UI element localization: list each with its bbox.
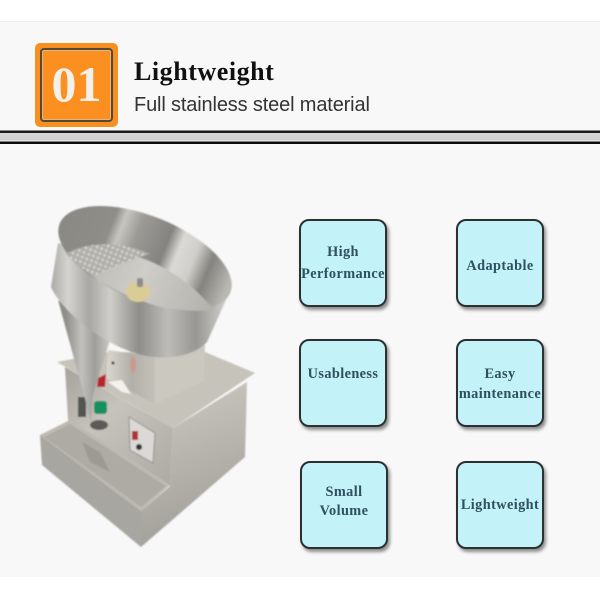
card: High Performance: High: [327, 244, 359, 260]
card: Lightweight: Lightweight: [461, 497, 539, 513]
card: Lightweight: [456, 461, 544, 549]
card: Small Volume: Volume: [320, 503, 368, 519]
tray front: [40, 435, 141, 547]
card: Small Volume: Small: [326, 484, 362, 500]
card: Easy maintenance: [456, 339, 544, 427]
card: High Performance: Performance: [301, 266, 385, 282]
machine: [40, 185, 255, 547]
red tab: [97, 374, 106, 387]
tray interior: [40, 420, 170, 511]
funnel: [58, 300, 110, 422]
subheading: Full stainless steel material: [134, 94, 370, 116]
card: Easy maintenance: Easy: [484, 366, 516, 382]
green button: [94, 401, 107, 414]
bowl interior: [44, 185, 246, 331]
card: Adaptable: [456, 219, 544, 307]
card: High Performance: [299, 219, 387, 307]
small display: [78, 397, 86, 417]
side panel: [141, 382, 247, 547]
top plate: [57, 352, 255, 428]
heading: Lightweight: [134, 57, 274, 86]
card: Usableness: Usableness: [308, 366, 378, 382]
back column: [106, 345, 205, 404]
hub: [126, 278, 150, 302]
divider rule: [0, 130, 600, 144]
front panel: [65, 367, 173, 486]
switch plate: [129, 417, 155, 463]
card: Usableness: [299, 339, 387, 427]
bowl outer wall: [51, 243, 232, 357]
perforated disc: [66, 244, 150, 277]
bowl floor: [67, 249, 214, 311]
number badge: [35, 43, 118, 127]
card: Small Volume: [300, 461, 388, 549]
card: Adaptable: Adaptable: [466, 258, 534, 274]
knob: [90, 420, 108, 430]
card: Easy maintenance: maintenance: [459, 386, 541, 402]
number badge: 01: [52, 56, 102, 112]
